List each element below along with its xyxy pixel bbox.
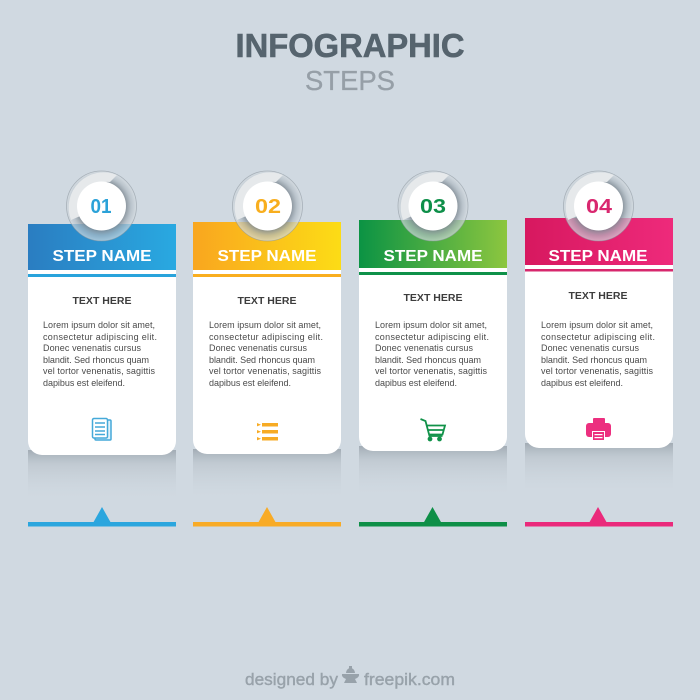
body text: vel tortor venenatis, sagittis [541, 366, 654, 376]
body text: dapibus est eleifend. [43, 378, 125, 388]
header band [193, 222, 341, 270]
card body [28, 224, 176, 455]
subtitle: STEPS [305, 65, 395, 96]
body text: dapibus est eleifend. [375, 378, 457, 388]
icon: documents [92, 418, 111, 440]
title [236, 27, 464, 96]
card body [525, 218, 673, 448]
panel: step 3 [359, 171, 507, 494]
badge [66, 171, 136, 241]
body text [541, 320, 655, 388]
footer credit: designed by [245, 670, 339, 689]
text heading: TEXT HERE [238, 295, 296, 307]
body text: Donec venenatis cursus [541, 343, 640, 353]
body text: Lorem ipsum dolor sit amet, [541, 320, 653, 330]
body text: blandit. Sed rhoncus quam [541, 355, 647, 365]
stripe [359, 272, 507, 275]
badge: 03 [420, 196, 446, 218]
icon: printer [586, 418, 611, 441]
step name: STEP NAME [218, 248, 317, 265]
step name: STEP NAME [384, 248, 483, 265]
badge: 04 [586, 196, 613, 218]
step name: STEP NAME [548, 248, 648, 265]
footer credit: freepik.com [364, 670, 455, 689]
body text: vel tortor venenatis, sagittis [209, 366, 322, 376]
badge [398, 171, 468, 241]
body text: blandit. Sed rhoncus quam [43, 355, 149, 365]
body text: blandit. Sed rhoncus quam [209, 355, 315, 365]
body text: Lorem ipsum dolor sit amet, [209, 320, 321, 330]
body text [209, 320, 323, 388]
badge [564, 171, 634, 241]
body text: Donec venenatis cursus [209, 343, 308, 353]
body text: consectetur adipiscing elit. [209, 332, 323, 342]
timeline marker: step 1 [28, 507, 176, 526]
icon: freepik mascot [342, 666, 359, 683]
text heading: TEXT HERE [72, 295, 132, 307]
card shadow [359, 446, 507, 494]
card shadow [193, 449, 341, 497]
body text: consectetur adipiscing elit. [541, 332, 655, 342]
body text [43, 320, 157, 388]
card shadow [525, 443, 673, 491]
text heading: TEXT HERE [404, 292, 462, 304]
body text: vel tortor venenatis, sagittis [43, 366, 156, 376]
icon: list [257, 423, 278, 440]
stripe [525, 269, 673, 272]
card body [359, 220, 507, 451]
card body [193, 222, 341, 454]
badge: 02 [255, 196, 281, 218]
stripe [193, 274, 341, 277]
badge: 01 [90, 196, 112, 218]
header band [359, 220, 507, 268]
body text: Donec venenatis cursus [375, 343, 474, 353]
card shadow [28, 450, 176, 498]
timeline marker: step 4 [525, 507, 673, 526]
header band [28, 224, 176, 270]
body text: dapibus est eleifend. [541, 378, 623, 388]
footer credit [245, 666, 455, 689]
icon: shopping cart [420, 419, 445, 440]
body text: Donec venenatis cursus [43, 343, 142, 353]
body text: consectetur adipiscing elit. [43, 332, 157, 342]
title: INFOGRAPHIC [236, 27, 464, 64]
stripe [28, 274, 176, 277]
panel: step 4 [525, 171, 673, 491]
timeline marker: step 2 [193, 507, 341, 526]
timeline marker: step 3 [359, 507, 507, 526]
body text: Lorem ipsum dolor sit amet, [375, 320, 487, 330]
header band [525, 218, 673, 265]
body text: blandit. Sed rhoncus quam [375, 355, 481, 365]
body text: dapibus est eleifend. [209, 378, 291, 388]
text heading: TEXT HERE [568, 290, 628, 302]
badge [232, 171, 302, 241]
panel: step 1 [28, 171, 176, 498]
body text: Lorem ipsum dolor sit amet, [43, 320, 155, 330]
body text: vel tortor venenatis, sagittis [375, 366, 488, 376]
panel: step 2 [193, 171, 341, 497]
step name: STEP NAME [52, 248, 152, 265]
body text [375, 320, 489, 388]
body text: consectetur adipiscing elit. [375, 332, 489, 342]
